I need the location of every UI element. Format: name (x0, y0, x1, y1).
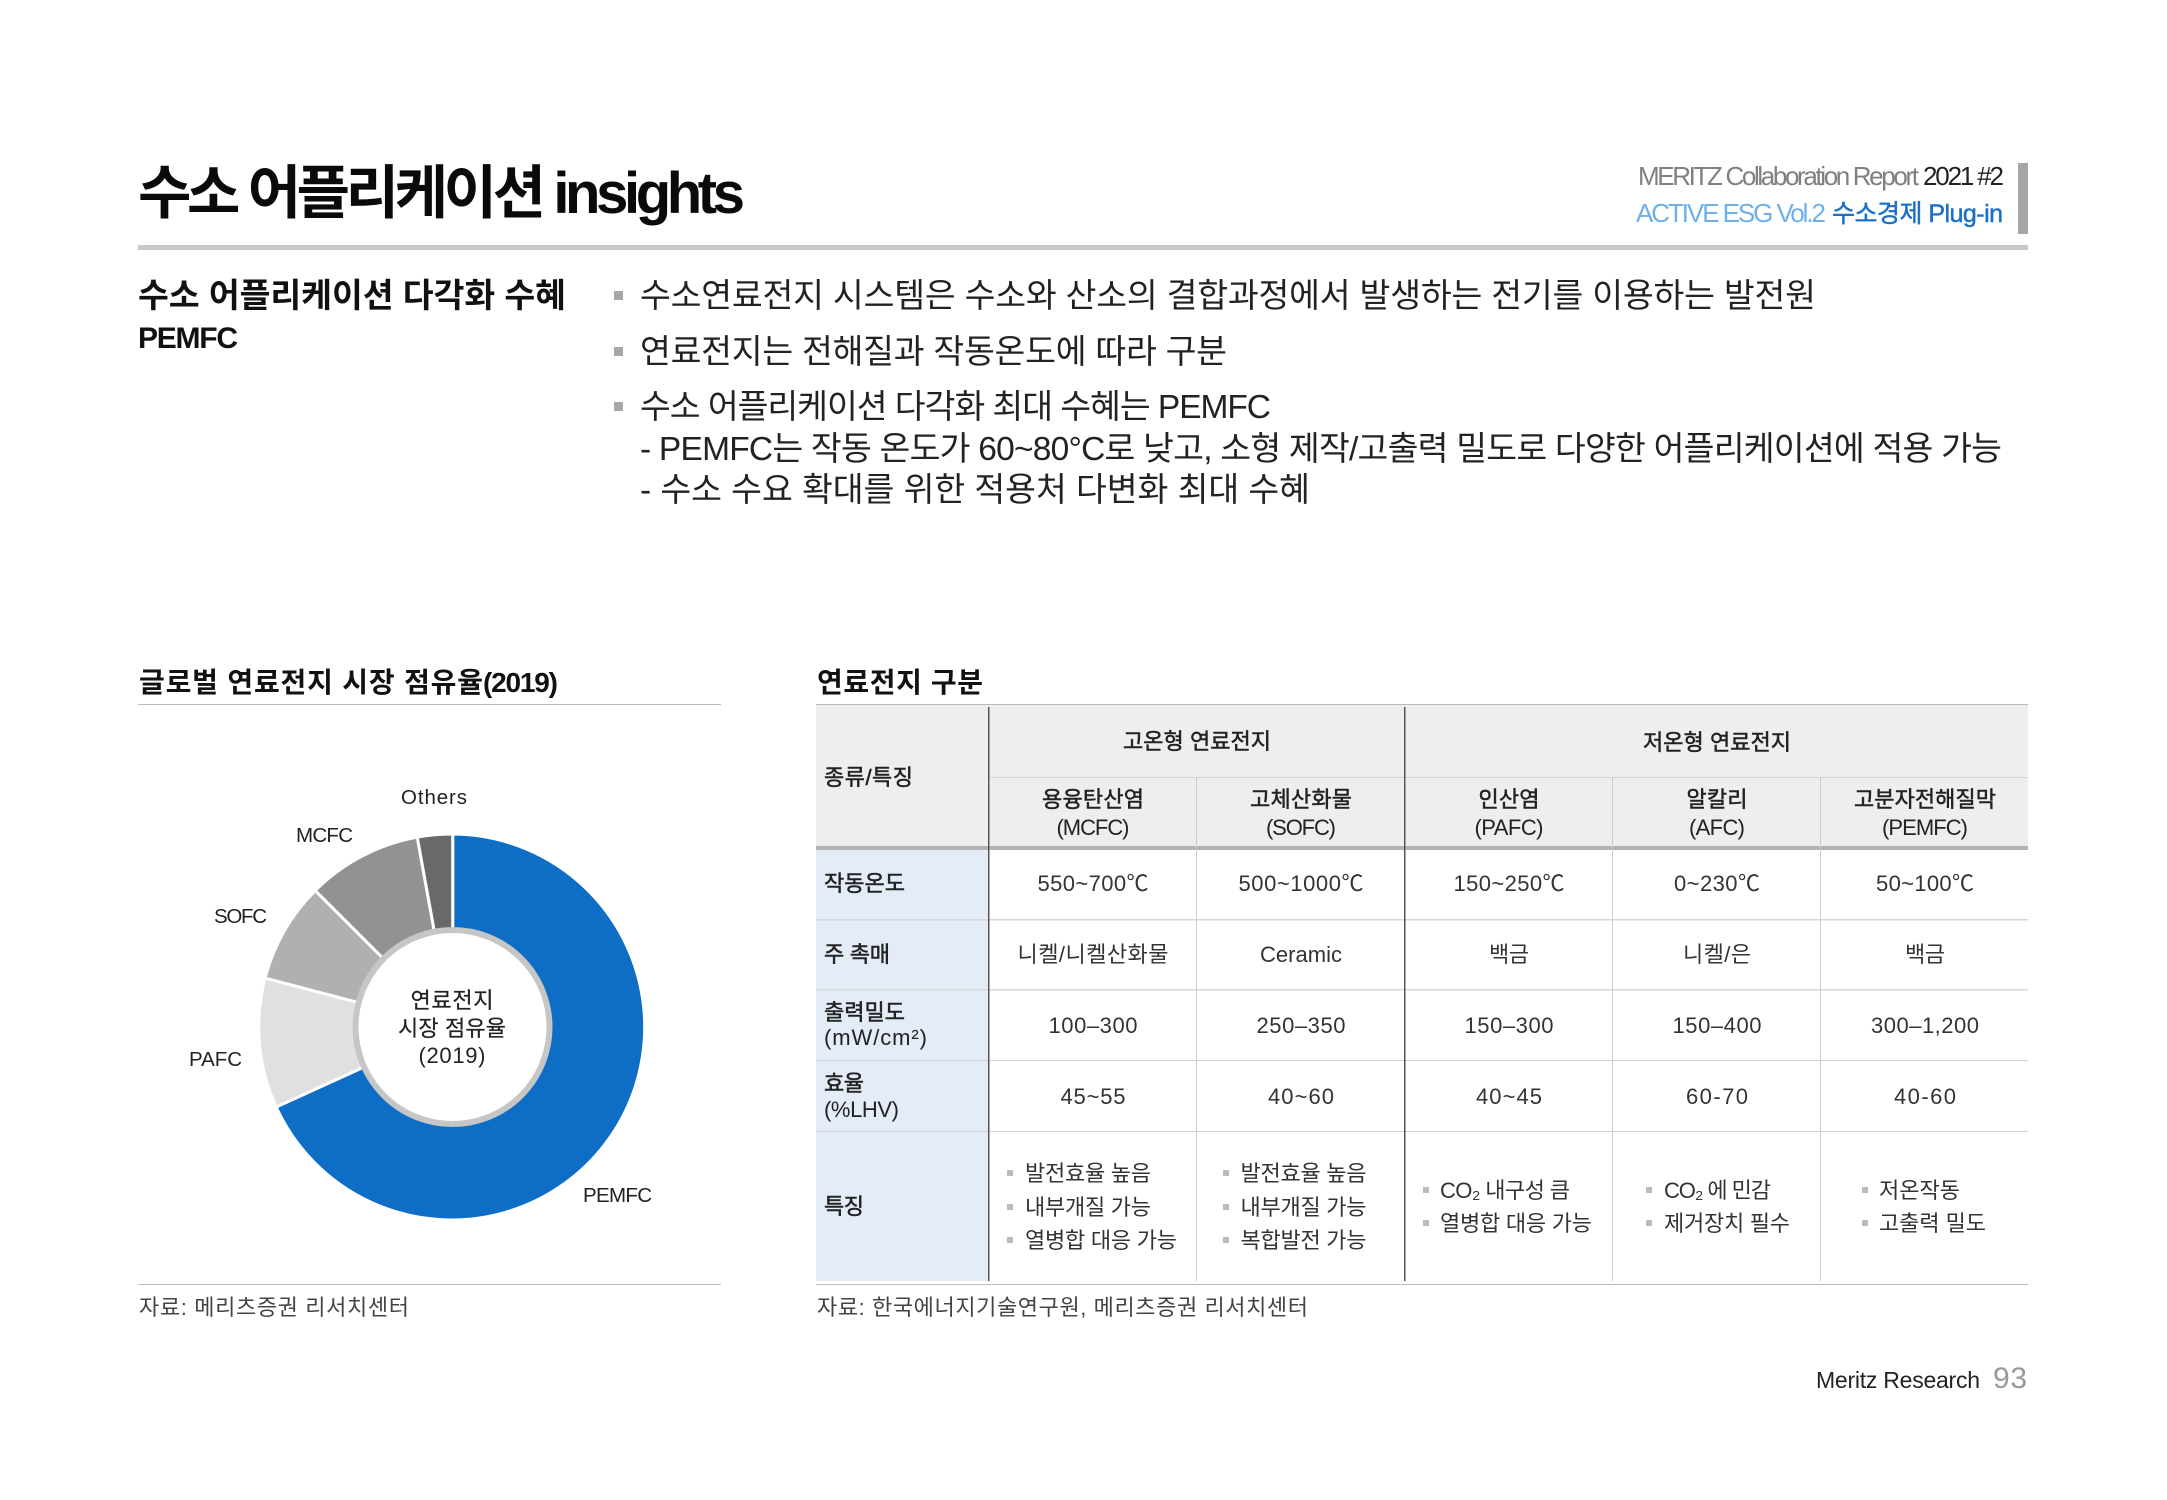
donut centre text: 시장 점유율 (398, 1016, 506, 1041)
row labels: (mW/cm²) (824, 1025, 927, 1050)
key points: 수소 어플리케이션 다각화 최대 수혜는 PEMFC (640, 389, 1271, 426)
chart source: 자료: 메리츠증권 리서치센터 (139, 1295, 409, 1320)
table header text: (PEMFC) (1882, 815, 1968, 840)
row: operating temperature: 500~1000℃ (1238, 871, 1364, 896)
row: catalyst (1018, 942, 1945, 967)
table header text: 고온형 연료전지 (1123, 729, 1271, 754)
table header text: 용융탄산염 (1042, 787, 1144, 812)
subheading: PEMFC (138, 322, 238, 355)
table header text: 저온형 연료전지 (1643, 730, 1791, 755)
fuel cell table (816, 704, 2028, 1285)
key points: 연료전지는 전해질과 작동온도에 따라 구분 (640, 334, 1227, 371)
key points (614, 278, 2002, 509)
row labels: (%LHV) (824, 1097, 899, 1122)
subheading (138, 278, 566, 355)
row: features: 고출력 밀도 (1879, 1211, 1986, 1236)
row labels: 주 촉매 (824, 942, 890, 967)
row: power density: 150–400 (1672, 1013, 1762, 1038)
row: features: 열병합 대응 가능 (1025, 1228, 1177, 1253)
key points: - 수소 수요 확대를 위한 적용처 다변화 최대 수혜 (640, 472, 1310, 509)
row labels: 종류/특징 (824, 765, 913, 790)
key points: - PEMFC는 작동 온도가 60~80°C로 낮고, 소형 제작/고출력 밀도로 다양한 어플리케이션에 적용 가능 (640, 431, 2002, 468)
table source: 자료: 한국에너지기술연구원, 메리츠증권 리서치센터 (817, 1295, 1308, 1320)
chart heading: 글로벌 연료전지 시장 점유율 (139, 667, 483, 698)
row: features: 발전효율 높음 (1240, 1161, 1366, 1186)
row: features (1007, 1161, 1986, 1253)
chart heading: (2019) (483, 667, 558, 698)
row: power density: 250–350 (1256, 1013, 1346, 1038)
row: features: 열병합 대응 가능 (1440, 1211, 1592, 1236)
row: efficiency: 40-60 (1894, 1084, 1956, 1109)
row: power density: 300–1,200 (1871, 1013, 1979, 1038)
footer brand: Meritz Research (1816, 1367, 1980, 1393)
table header text: 인산염 (1478, 787, 1540, 812)
row: catalyst: 니켈/니켈산화물 (1018, 942, 1168, 967)
row: efficiency (1060, 1084, 1956, 1109)
donut chart (189, 786, 652, 1220)
chart source rule (138, 1284, 721, 1285)
donut centre text: 연료전지 (410, 988, 494, 1013)
donut labels: Others (401, 786, 467, 809)
donut labels: MCFC (296, 824, 353, 847)
row: catalyst: Ceramic (1260, 942, 1342, 967)
table header text: (AFC) (1689, 815, 1745, 840)
row: features: 저온작동 (1879, 1178, 1960, 1203)
header tab (2018, 163, 2028, 234)
row: operating temperature: 0~230℃ (1674, 871, 1760, 896)
row: power density: 100–300 (1048, 1013, 1138, 1038)
donut centre text: (2019) (418, 1043, 486, 1068)
donut centre text (398, 988, 506, 1068)
table header text (1042, 729, 1996, 840)
donut labels: SOFC (214, 905, 267, 928)
row labels: 작동온도 (824, 871, 905, 896)
page number: 93 (1993, 1362, 2027, 1395)
table backgrounds (816, 705, 2028, 1281)
row: efficiency: 60-70 (1686, 1084, 1748, 1109)
table header text: (PAFC) (1474, 815, 1544, 840)
row: features: 제거장치 필수 (1664, 1211, 1790, 1236)
row: efficiency: 40~45 (1476, 1084, 1542, 1109)
row: operating temperature: 550~700℃ (1038, 871, 1148, 896)
row: catalyst: 백금 (1489, 942, 1529, 967)
row: catalyst: 니켈/은 (1683, 942, 1751, 967)
row: power density: 150–300 (1464, 1013, 1554, 1038)
row: features: 내부개질 가능 (1025, 1195, 1151, 1220)
row labels (824, 765, 927, 1219)
row labels: 출력밀도 (824, 1000, 905, 1025)
report header: MERITZ Collaboration Report (1638, 161, 1920, 191)
row: features: CO₂ 에 민감 (1664, 1178, 1771, 1203)
row: features: 내부개질 가능 (1240, 1195, 1366, 1220)
row: operating temperature: 50~100℃ (1876, 871, 1974, 896)
row: features: 발전효율 높음 (1025, 1161, 1151, 1186)
row: catalyst: 백금 (1905, 942, 1945, 967)
donut labels (189, 786, 652, 1207)
report header: 2021 #2 (1923, 161, 2004, 191)
report header: 수소경제 Plug-in (1832, 200, 2003, 228)
row: efficiency: 40~60 (1268, 1084, 1334, 1109)
row labels: 효율 (824, 1071, 864, 1096)
table header text: 고체산화물 (1250, 787, 1352, 812)
title: 수소 어플리케이션 insights (138, 161, 745, 226)
row labels: 특징 (824, 1194, 864, 1219)
row: operating temperature (1038, 871, 1974, 896)
key points: 수소연료전지 시스템은 수소와 산소의 결합과정에서 발생하는 전기를 이용하는 발전원 (640, 278, 1816, 315)
table heading: 연료전지 구분 (817, 667, 983, 698)
table header text: (SOFC) (1266, 815, 1336, 840)
report header (1636, 161, 2004, 228)
row: efficiency: 45~55 (1060, 1084, 1126, 1109)
row: features: 복합발전 가능 (1240, 1228, 1366, 1253)
table header text: 고분자전해질막 (1854, 787, 1996, 812)
subheading: 수소 어플리케이션 다각화 수혜 (138, 278, 566, 315)
table header text: (MCFC) (1056, 815, 1130, 840)
row: features: CO₂ 내구성 큼 (1440, 1178, 1570, 1203)
row: operating temperature: 150~250℃ (1454, 871, 1564, 896)
report header: ACTIVE ESG Vol.2 (1636, 198, 1826, 228)
table header text: 알칼리 (1686, 787, 1748, 812)
donut labels: PAFC (189, 1048, 242, 1071)
row: power density (1048, 1013, 1979, 1038)
title rule (138, 245, 2028, 250)
donut labels: PEMFC (583, 1184, 652, 1207)
